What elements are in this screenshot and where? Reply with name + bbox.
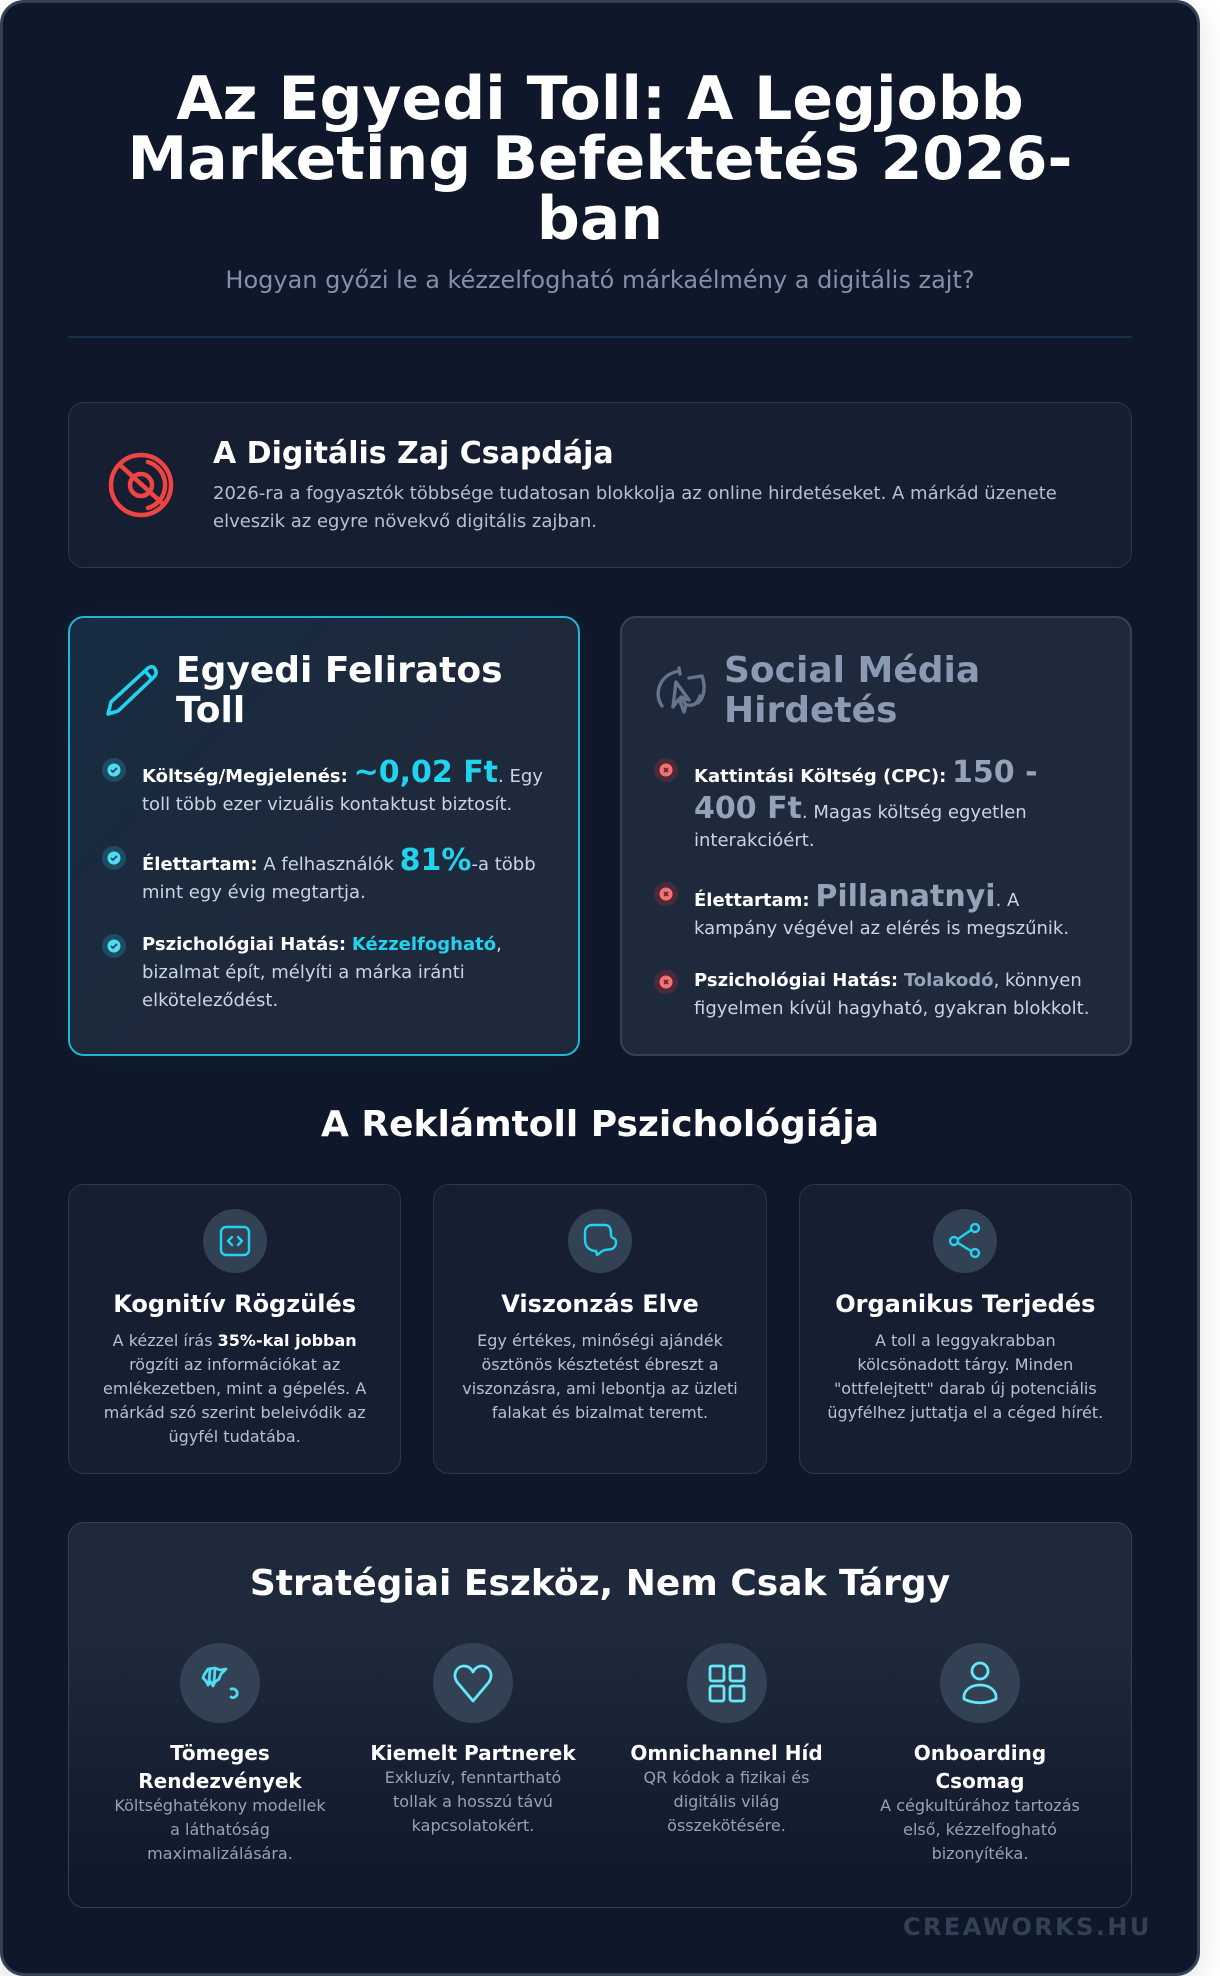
text — [644, 1768, 809, 1835]
item 2 — [142, 843, 536, 903]
icon: share — [933, 1209, 997, 1273]
panel: digital noise trap — [68, 402, 1132, 568]
title: Az Egyedi Toll: A Legjobb — [176, 64, 1024, 134]
icon: grid — [686, 1643, 766, 1723]
subtitle: Hogyan győzi le a kézzelfogható márkaélmény a digitális zajt? — [225, 266, 975, 294]
item 3: figyelmen kívül hagyható, gyakran blokkolt. — [694, 998, 1089, 1019]
list: social media drawbacks — [654, 755, 1089, 1019]
text: bizonyítéka. — [932, 1844, 1028, 1863]
heading: custom pen: Toll — [176, 690, 245, 731]
card text — [462, 1331, 738, 1422]
title: Omnichannel Híd — [630, 1741, 823, 1765]
item 1: 400 Ft. Magas költség egyetlen — [694, 791, 1027, 826]
item 2 — [694, 879, 1069, 939]
item 3 — [142, 934, 502, 1011]
heading: custom pen: Egyedi Feliratos — [176, 650, 503, 691]
text: tollak a hosszú távú — [393, 1792, 553, 1811]
section heading: psychology: A Reklámtoll Pszichológiája — [321, 1104, 879, 1145]
title: Kiemelt Partnerek — [370, 1741, 576, 1765]
panel: social media ads — [620, 616, 1132, 1056]
card text: ügyfél tudatába. — [169, 1427, 301, 1446]
icon: code box — [203, 1209, 267, 1273]
body text: 2026-ra a fogyasztók többsége tudatosan blokkolja az online hirdetéseket. A márkád üzenete — [213, 483, 1057, 504]
item 2: kampány végével az elérés is megszűnik. — [694, 918, 1069, 939]
icon: blocked signal — [108, 452, 174, 518]
item 3 — [694, 970, 1089, 1019]
card text: falakat és bizalmat teremt. — [492, 1403, 708, 1422]
item 3: elköteleződést. — [142, 990, 278, 1011]
card text: ösztönös késztetést ébreszt a — [481, 1355, 719, 1374]
heading: social media: Social Média — [724, 650, 980, 691]
icon: pen — [106, 665, 158, 716]
item 1 — [694, 755, 1038, 851]
text: A cégkultúrához tartozás — [880, 1796, 1080, 1815]
card title: Viszonzás Elve — [501, 1290, 699, 1318]
icon: social refresh cursor — [656, 666, 706, 714]
body text — [213, 483, 1057, 532]
title — [128, 64, 1072, 254]
heading: custom pen — [176, 650, 503, 731]
title: Marketing Befektetés 2026- — [128, 124, 1072, 194]
item 1: Költség/Megjelenés: ~0,02 Ft. Egy — [142, 755, 543, 790]
item 3: Pszichológiai Hatás: Kézzelfogható, — [142, 934, 502, 955]
card text: márkád szó szerint beleivódik az — [104, 1403, 366, 1422]
card text: rögzíti az információkat az — [129, 1355, 340, 1374]
icon: event scribble — [180, 1643, 260, 1723]
panel: strategic tool — [68, 1522, 1132, 1908]
check icon 1 — [102, 758, 126, 782]
check icon 3 — [102, 934, 126, 958]
title: Rendezvények — [138, 1769, 302, 1793]
list: custom pen benefits — [102, 755, 543, 1011]
card text: Egy értékes, minőségi ajándék — [477, 1331, 723, 1350]
heading: social media — [724, 650, 980, 731]
icon: speech bubble — [568, 1209, 632, 1273]
card: organic spread — [799, 1184, 1132, 1474]
text: első, kézzelfogható — [903, 1820, 1057, 1839]
card text: A kézzel írás 35%-kal jobban — [113, 1331, 357, 1350]
item 1: Kattintási Költség (CPC): 150 - — [694, 755, 1038, 790]
title: Csomag — [936, 1769, 1024, 1793]
card text: kölcsönadott tárgy. Minden — [857, 1355, 1073, 1374]
text: maximalizálására. — [147, 1844, 293, 1863]
watermark: CREAWORKS.HU — [903, 1913, 1152, 1941]
item 1: interakcióért. — [694, 830, 815, 851]
heading: social media: Hirdetés — [724, 690, 897, 731]
text — [114, 1796, 326, 1863]
card text — [103, 1331, 366, 1446]
icon: person — [940, 1643, 1020, 1723]
card title: Organikus Terjedés — [835, 1290, 1095, 1318]
item 3: Pszichológiai Hatás: Tolakodó, könnyen — [694, 970, 1082, 991]
card: cognitive retention — [68, 1184, 401, 1474]
card text: emlékezetben, mint a gépelés. A — [103, 1379, 366, 1398]
body text: elveszik az egyre növekvő digitális zajban. — [213, 511, 597, 532]
cross icon 2 — [654, 882, 678, 906]
text: QR kódok a fizikai és — [644, 1768, 809, 1787]
item 3: bizalmat épít, mélyíti a márka iránti — [142, 962, 465, 983]
icon: heart — [433, 1643, 513, 1723]
card text: "ottfelejtett" darab új potenciális — [834, 1379, 1097, 1398]
item: mass events — [114, 1643, 326, 1863]
text: a láthatóság — [170, 1820, 270, 1839]
item 1 — [142, 755, 543, 815]
cross icon 3 — [654, 970, 678, 994]
card text: viszonzásra, ami lebontja az üzleti — [462, 1379, 738, 1398]
item 2: mint egy évig megtartja. — [142, 882, 366, 903]
item 1: toll több ezer vizuális kontaktust biztosít. — [142, 794, 512, 815]
title: Onboarding — [914, 1741, 1046, 1765]
strategic heading: Stratégiai Eszköz, Nem Csak Tárgy — [250, 1563, 950, 1604]
text — [880, 1796, 1080, 1863]
item 2: Élettartam: A felhasználók 81%-a több — [142, 843, 536, 878]
heading: A Digitális Zaj Csapdája — [213, 436, 614, 471]
title — [138, 1741, 302, 1793]
title: ban — [537, 184, 663, 254]
card title: Kognitív Rögzülés — [113, 1290, 356, 1318]
item: onboarding — [880, 1643, 1080, 1863]
text — [385, 1768, 561, 1835]
text: kapcsolatokért. — [412, 1816, 534, 1835]
panel: custom pen — [68, 616, 580, 1056]
item: omnichannel — [630, 1643, 823, 1835]
text: digitális világ — [674, 1792, 779, 1811]
check icon 2 — [102, 846, 126, 870]
title — [914, 1741, 1046, 1793]
card text — [827, 1331, 1103, 1422]
card: reciprocity — [433, 1184, 767, 1474]
text: Exkluzív, fenntartható — [385, 1768, 561, 1787]
card text: A toll a leggyakrabban — [875, 1331, 1056, 1350]
item: key partners — [370, 1643, 576, 1835]
cross icon 1 — [654, 758, 678, 782]
item 2: Élettartam: Pillanatnyi. A — [694, 879, 1019, 914]
text: Költséghatékony modellek — [114, 1796, 326, 1815]
card text: ügyfélhez juttatja el a céged hírét. — [827, 1403, 1103, 1422]
text: összekötésére. — [667, 1816, 786, 1835]
title: Tömeges — [170, 1741, 270, 1765]
